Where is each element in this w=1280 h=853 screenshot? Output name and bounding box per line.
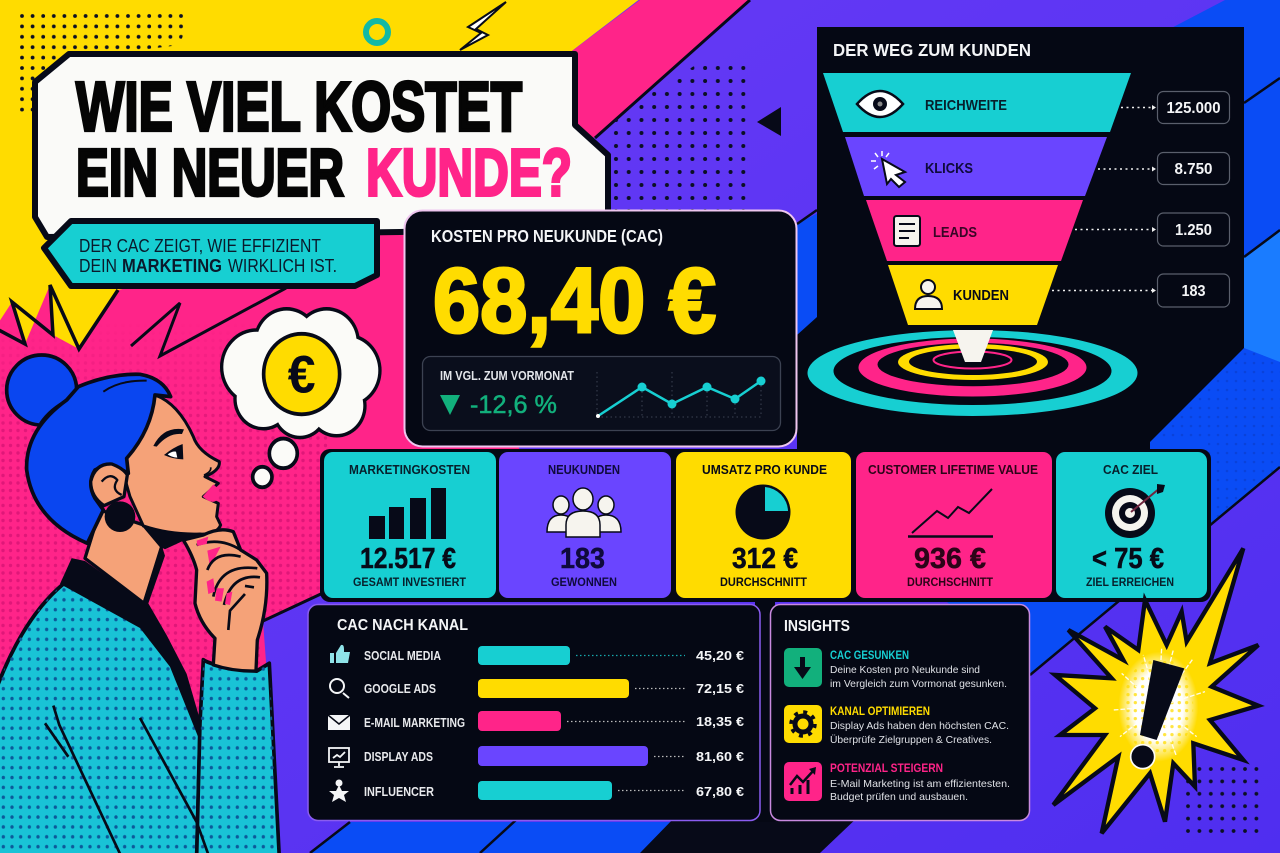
insight: Kanal optimieren: Display Ads haben den höchsten CAC. [830, 720, 1009, 732]
funnel backing above rings [900, 325, 1050, 330]
target rings [808, 330, 1138, 416]
row: Google Ads [330, 679, 744, 698]
background: pink wedge at top [560, 0, 750, 138]
dark band behind KPI row [320, 449, 1211, 602]
neck [85, 510, 162, 603]
dot grid lower right [1184, 765, 1262, 835]
collar [60, 545, 200, 737]
KPI card: Marketingkosten: 12.517 € [360, 543, 456, 575]
icon: person star [329, 780, 349, 802]
background: light blue stripe [1244, 230, 1280, 362]
background: separator lines on the right [797, 78, 1280, 675]
background: large pink area [0, 225, 520, 853]
icon: rising chart [784, 762, 822, 801]
CAC label: KOSTEN PRO NEUKUNDE (CAC) [431, 226, 663, 246]
hair accent lines [40, 381, 147, 423]
KPI card: Customer Lifetime Value: DURCHSCHNITT [907, 575, 994, 589]
value box: Kunden: 183 [1182, 283, 1206, 300]
background: purple dot field [612, 62, 750, 215]
icon: monitor [329, 748, 349, 767]
icon: people group [547, 488, 621, 537]
subtitle line 2: WIRKLICH IST. [228, 255, 337, 276]
eye [164, 444, 183, 459]
KPI card: Customer Lifetime Value [856, 452, 1052, 598]
insight: Potenzial steigern: E-Mail Marketing ist am effizientesten. [830, 778, 1010, 790]
KPI card: Customer Lifetime Value: CUSTOMER LIFETIME VALUE [868, 462, 1038, 477]
dark gap between bottom panels [755, 600, 775, 822]
row: Display Ads [329, 746, 744, 767]
funnel stage: Klicks [845, 137, 1107, 196]
insight: CAC gesunken: Deine Kosten pro Neukunde sind [830, 664, 980, 676]
earring [105, 501, 135, 532]
nostril [204, 467, 211, 475]
insight: CAC gesunken [784, 648, 1007, 690]
background: burst outline [0, 285, 118, 349]
icon: down arrow [784, 648, 822, 687]
funnel stage: Reichweite: REICHWEITE [925, 97, 1007, 114]
value box: Klicks [1158, 152, 1230, 184]
background: pink wedge edge [595, 0, 750, 138]
comparison box [422, 356, 780, 430]
funnel stage: Reichweite [823, 73, 1131, 132]
background: bottom dark strip [640, 815, 860, 853]
sparkline chart [596, 372, 766, 418]
funnel stage: Klicks: KLICKS [925, 160, 973, 177]
insight: Kanal optimieren: KANAL OPTIMIEREN [830, 704, 930, 718]
panel: CAC nach Kanal [308, 604, 760, 820]
KPI card: Umsatz pro Kunde: UMSATZ PRO KUNDE [702, 462, 827, 477]
heading line 1: WIE VIEL KOSTET [76, 68, 522, 146]
funnel stage: Kunden [888, 265, 1058, 325]
value box: Leads: 1.250 [1175, 222, 1212, 239]
icon: teal ring [366, 21, 388, 43]
KPI card: CAC Ziel: ZIEL ERREICHEN [1086, 575, 1174, 589]
row: Social Media: SOCIAL MEDIA [364, 649, 441, 663]
KPI card: CAC Ziel: CAC ZIEL [1103, 462, 1158, 477]
subtitle line 1: DER CAC ZEIGT, WIE EFFIZIENT [79, 235, 321, 256]
subtitle ribbon [44, 221, 377, 286]
insight: Potenzial steigern: POTENZIAL STEIGERN [830, 761, 943, 775]
icon: dark triangle [757, 107, 781, 136]
icon: down triangle [440, 395, 460, 415]
ear detail [102, 476, 122, 495]
icon: growth line [908, 489, 993, 536]
jacket [0, 584, 279, 853]
head [7, 355, 267, 671]
KPI card: Neukunden: 183 [560, 543, 605, 575]
value box: Reichweite: 125.000 [1166, 100, 1220, 117]
funnel connector arrows [1052, 105, 1156, 293]
KPI card: Neukunden: NEUKUNDEN [548, 462, 620, 477]
row: Display Ads: DISPLAY ADS [364, 750, 433, 764]
icon: pie chart [736, 484, 790, 540]
icon: gear [784, 705, 822, 743]
comparison label: IM VGL. ZUM VORMONAT [440, 369, 574, 383]
hair [27, 374, 171, 543]
row: Google Ads: 72,15 € [696, 681, 744, 696]
icon: envelope [328, 715, 350, 730]
background: blue dot patch [1150, 348, 1280, 530]
value box: Kunden [1158, 274, 1230, 307]
icon: document [894, 216, 920, 246]
icon: user [915, 280, 942, 309]
KPI card: Marketingkosten: MARKETINGKOSTEN [349, 462, 470, 477]
insights heading: INSIGHTS [784, 618, 850, 635]
value box: Klicks: 8.750 [1174, 161, 1212, 178]
background: yellow area with burst [0, 0, 645, 349]
value box: Reichweite [1158, 92, 1230, 124]
background: pink edge line [263, 593, 323, 621]
insight: CAC gesunken: CAC GESUNKEN [830, 648, 909, 662]
funnel heading: DER WEG ZUM KUNDEN [833, 40, 1031, 60]
insight: Kanal optimieren: Überprüfe Zielgruppen & Creatives. [830, 734, 992, 746]
panel: funnel [808, 40, 1230, 416]
hair bun [7, 355, 77, 425]
KPI card: Customer Lifetime Value: 936 € [914, 543, 986, 575]
row: Influencer: INFLUENCER [364, 785, 434, 799]
heading line 2: EIN NEUER [76, 136, 344, 210]
KPI card: Marketingkosten: GESAMT INVESTIERT [353, 575, 467, 589]
value box: Leads [1158, 213, 1230, 246]
background: blue right band [797, 0, 1280, 675]
row: Social Media [330, 645, 744, 665]
lips [203, 484, 218, 502]
dark backing for cards [797, 27, 1244, 452]
icon: exclamation burst [1053, 548, 1258, 833]
subtitle line 2: MARKETING [122, 255, 222, 276]
eyebrow [153, 429, 184, 447]
row: Display Ads: 81,60 € [696, 749, 744, 764]
thought bubble with euro coin: € [288, 344, 316, 404]
hand [183, 530, 267, 671]
background: bottom line [310, 820, 516, 853]
row: Google Ads: GOOGLE ADS [364, 682, 436, 696]
insight: CAC gesunken: im Vergleich zum Vormonat gesunken. [830, 678, 1007, 690]
title panel [35, 54, 608, 237]
KPI card: Neukunden [499, 452, 671, 598]
background: pink halftone [1, 354, 328, 710]
KPI card: Umsatz pro Kunde: 312 € [732, 543, 798, 575]
background: yellow dot grid [20, 12, 190, 115]
thought bubble with euro coin [220, 307, 382, 487]
illustration: thinking woman [0, 355, 279, 853]
funnel stage: Kunden: KUNDEN [953, 287, 1009, 304]
KPI card: Neukunden: GEWONNEN [551, 575, 617, 589]
icon: eye [857, 91, 903, 117]
CAC value: 68,40 € [433, 250, 716, 352]
background: spike line [131, 288, 286, 356]
row: Influencer: 67,80 € [696, 784, 744, 799]
icon: cursor [871, 151, 905, 187]
insight: Potenzial steigern [784, 761, 1010, 803]
icon: bar chart [369, 488, 446, 539]
jaw shadow [143, 526, 200, 549]
icon: magnifier [330, 679, 349, 698]
panel: CAC main card [404, 210, 796, 446]
row: Influencer [329, 780, 744, 802]
KPI card: CAC Ziel: < 75 € [1092, 543, 1164, 575]
insight: Kanal optimieren [784, 704, 1009, 746]
row: E-Mail Marketing [328, 711, 744, 731]
panel: Insights [770, 604, 1030, 820]
icon: thumbs up [330, 645, 350, 663]
face [123, 395, 221, 534]
funnel stage: Leads: LEADS [933, 224, 977, 241]
KPI card: Umsatz pro Kunde [676, 452, 851, 598]
change value: -12,6 % [470, 391, 557, 419]
icon: lightning bolt [460, 2, 506, 50]
KPI card: CAC Ziel [1056, 452, 1207, 598]
row: Social Media: 45,20 € [696, 648, 744, 663]
ear [91, 464, 127, 506]
KPI card: Umsatz pro Kunde: DURCHSCHNITT [720, 575, 808, 589]
subtitle line 2: DEIN [79, 255, 117, 276]
funnel spout [953, 330, 993, 362]
panel heading: CAC NACH KANAL [337, 617, 468, 634]
icon: target with arrow [1105, 484, 1165, 538]
background: bottom blue strip [310, 822, 680, 853]
KPI card: Marketingkosten [324, 452, 496, 598]
heading highlight: KUNDE? [366, 136, 572, 210]
funnel stage: Leads [866, 200, 1083, 261]
subtitle line 2 [79, 255, 337, 276]
insight: Potenzial steigern: Budget prüfen und ausbauen. [830, 791, 968, 803]
row: E-Mail Marketing: E-MAIL MARKETING [364, 716, 465, 730]
row: E-Mail Marketing: 18,35 € [696, 714, 744, 729]
